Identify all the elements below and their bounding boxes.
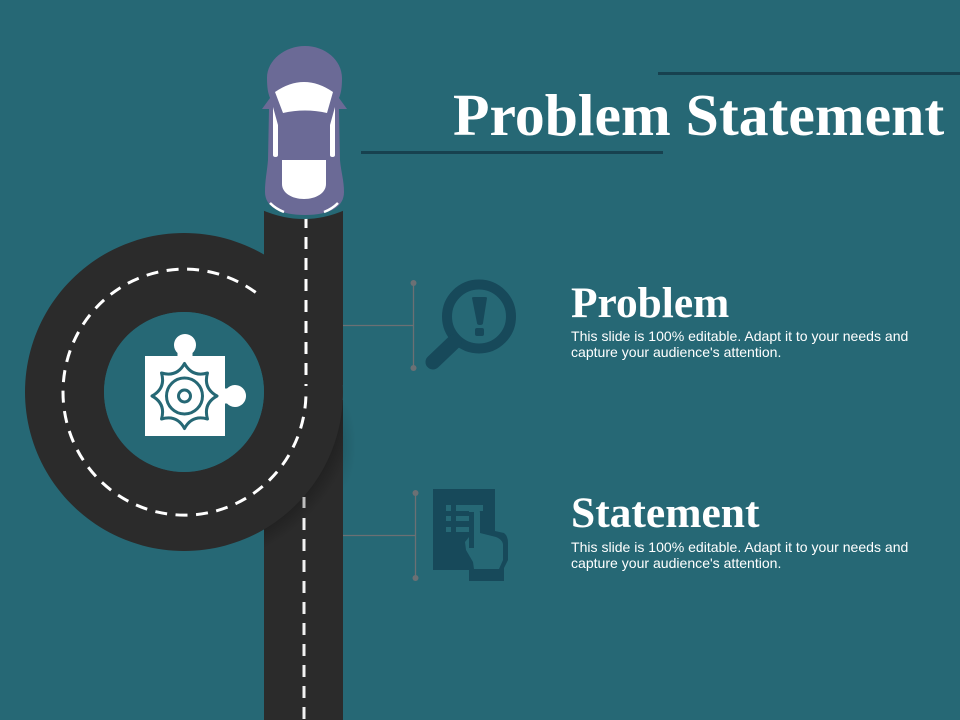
- dashed line: lower first dash: [302, 497, 306, 508]
- connector: problem: [343, 280, 416, 371]
- dashed line: lower: [302, 518, 306, 720]
- car body: [262, 46, 347, 215]
- pointing hand: [465, 508, 503, 569]
- car: [262, 46, 347, 219]
- soft glow beside the road: [320, 397, 356, 493]
- car windshield: [275, 82, 333, 113]
- icon: magnifier with exclamation: [433, 284, 511, 362]
- road: lower vertical segment: [264, 400, 343, 720]
- dashed line: upper: [304, 216, 308, 386]
- puzzle piece with gear icon: [145, 334, 246, 436]
- statement body text: [571, 539, 908, 571]
- statement body text: This slide is 100% editable. Adapt it to your needs and: [571, 539, 908, 555]
- problem body text: [571, 328, 908, 360]
- title rule: top right: [658, 72, 960, 75]
- document and hand outline: [433, 489, 508, 581]
- problem heading: Problem: [571, 279, 729, 327]
- ring shadow: [264, 404, 343, 530]
- road: circular ring: [25, 233, 343, 551]
- statement heading: Statement: [571, 489, 760, 537]
- road: upper vertical segment: [264, 208, 343, 385]
- title rule: lower: [361, 151, 663, 154]
- list marks: [446, 505, 483, 532]
- car side windows: [273, 107, 335, 157]
- dashed line: ring: [63, 269, 306, 515]
- icon: document with pointing hand: [433, 489, 508, 581]
- gear: [152, 364, 217, 428]
- problem body text: This slide is 100% editable. Adapt it to your needs and: [571, 328, 908, 344]
- car tail lights: [270, 203, 338, 212]
- car rear window: [282, 160, 326, 199]
- connector: statement: [343, 490, 418, 581]
- car shadow: [262, 190, 345, 219]
- puzzle piece: [145, 334, 246, 436]
- problem body text: capture your audience's attention.: [571, 344, 781, 360]
- finger line: [469, 512, 474, 548]
- statement body text: capture your audience's attention.: [571, 555, 781, 571]
- title: Problem Statement: [453, 82, 944, 148]
- ring inner hole edge: [104, 312, 264, 472]
- road: spiral with dashed centre line: [8, 208, 360, 720]
